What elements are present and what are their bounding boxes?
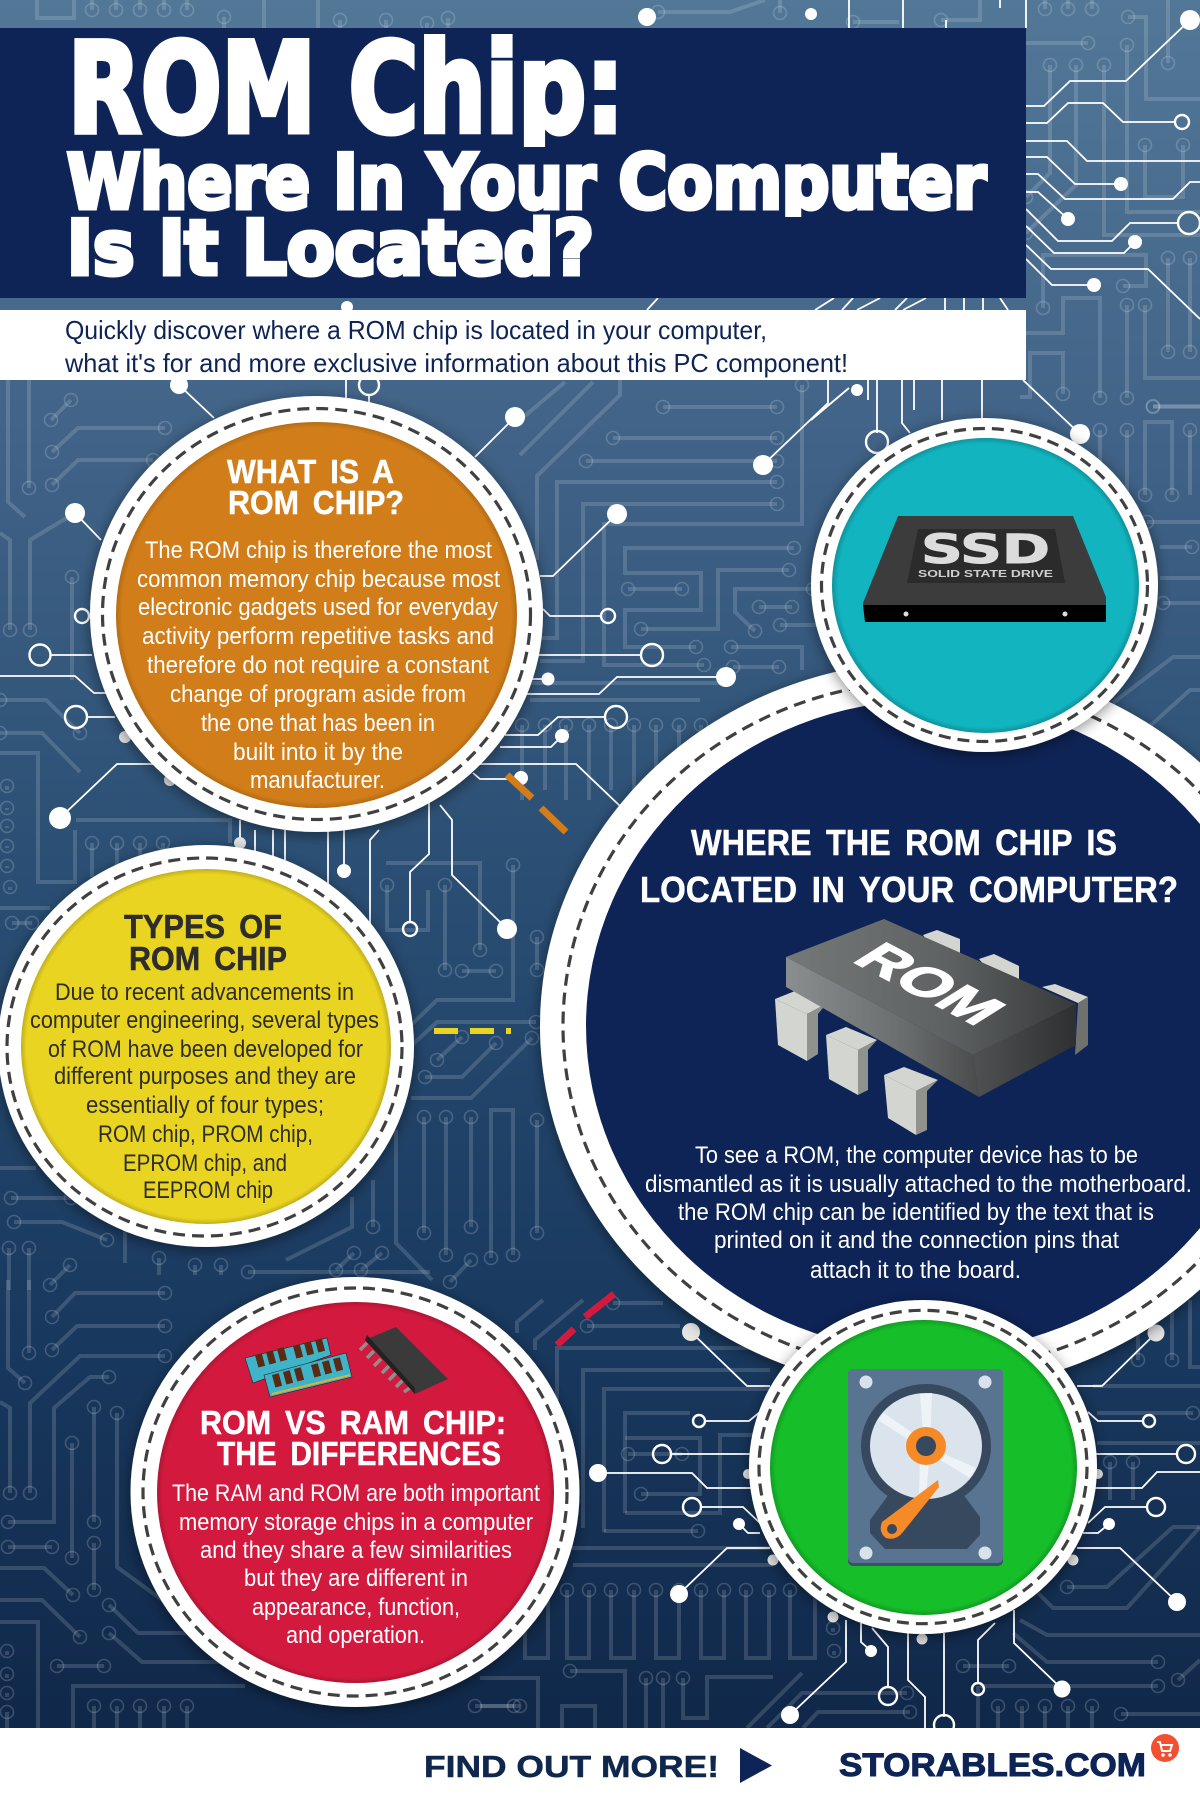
heading: ROM vs RAM chip: ROM VS RAM CHIP: <box>200 1405 506 1442</box>
body text: types of ROM chip: different purposes and they are <box>54 1063 356 1090</box>
body text: ROM vs RAM chip: memory storage chips in a computer <box>179 1509 533 1536</box>
body text: ROM vs RAM chip: and they share a few similarities <box>200 1537 512 1564</box>
icon: SSD drive: SSD <box>921 527 1050 573</box>
body text: where the ROM chip is located <box>645 1142 1192 1284</box>
heading: types of ROM chip <box>124 909 287 978</box>
icon: ROM chip <box>775 919 1088 1135</box>
heading: ROM vs RAM chip <box>200 1405 506 1473</box>
chip label: ROM <box>841 935 1019 1033</box>
body text: types of ROM chip: EPROM chip, and <box>123 1150 287 1177</box>
body text: types of ROM chip: of ROM have been developed for <box>48 1036 363 1063</box>
body text: types of ROM chip: EEPROM chip <box>143 1177 273 1204</box>
panel: types of ROM chip <box>0 845 414 1247</box>
body text: what is a ROM chip: built into it by the <box>233 739 403 766</box>
body text: what is a ROM chip: change of program aside from <box>170 681 466 708</box>
body text: where the ROM chip is located: To see a ROM, the computer device has to be <box>695 1142 1138 1169</box>
icon: hard disk drive <box>848 1369 1003 1566</box>
body text: ROM vs RAM chip: but they are different in <box>244 1565 468 1592</box>
body text: where the ROM chip is located: attach it to the board. <box>810 1257 1021 1284</box>
body text: types of ROM chip: Due to recent advancements in <box>55 979 354 1006</box>
body text: types of ROM chip: ROM chip, PROM chip, <box>98 1121 313 1148</box>
icon: SSD drive: SOLID STATE DRIVE <box>918 568 1053 580</box>
body text: types of ROM chip: essentially of four types; <box>86 1092 324 1119</box>
call to action: FIND OUT MORE! <box>424 1749 719 1784</box>
title line 1: ROM Chip: <box>68 18 624 162</box>
body text: what is a ROM chip: the one that has been in <box>201 710 435 737</box>
heading: where the ROM chip is located <box>640 822 1178 910</box>
body text: ROM vs RAM chip: and operation. <box>286 1622 425 1649</box>
subtitle panel: Quickly discover where a ROM chip is located in your computer, <box>65 315 767 345</box>
icon: cart badge <box>1151 1734 1179 1762</box>
heading: ROM vs RAM chip: THE DIFFERENCES <box>217 1436 501 1473</box>
panel: hard drive circle <box>749 1300 1097 1634</box>
brand name: STORABLES.COM <box>839 1747 1146 1783</box>
title line 3: Is It Located? <box>67 204 594 292</box>
panel: what is a ROM chip <box>90 396 543 832</box>
heading: what is a ROM chip: ROM CHIP? <box>228 485 404 522</box>
heading: what is a ROM chip <box>227 454 404 522</box>
dashes: yellow connector <box>434 1028 511 1034</box>
footer bar <box>0 1728 1200 1800</box>
body text: where the ROM chip is located: printed on it and the connection pins that <box>714 1227 1119 1254</box>
subtitle panel: what it's for and more exclusive information about this PC component! <box>64 348 848 378</box>
body text: what is a ROM chip: common memory chip because most <box>137 566 500 593</box>
panel: SSD circle <box>811 418 1158 752</box>
body text: where the ROM chip is located: the ROM chip can be identified by the text that is <box>678 1199 1154 1226</box>
panel: ROM vs RAM chip <box>130 1277 580 1707</box>
icon: SSD drive <box>863 516 1106 622</box>
body text: what is a ROM chip <box>137 537 500 794</box>
body text: what is a ROM chip: manufacturer. <box>250 767 385 794</box>
body text: what is a ROM chip: electronic gadgets used for everyday <box>138 594 499 621</box>
icon: RAM sticks <box>245 1338 352 1397</box>
body text: ROM vs RAM chip <box>172 1480 540 1649</box>
heading: types of ROM chip: TYPES OF <box>124 909 282 946</box>
title banner <box>0 18 1026 298</box>
heading: what is a ROM chip: WHAT IS A <box>227 454 394 491</box>
heading: types of ROM chip: ROM CHIP <box>129 941 287 978</box>
panel: where the ROM chip is located <box>540 661 1200 1391</box>
body text: types of ROM chip <box>30 979 379 1204</box>
body text: what is a ROM chip: The ROM chip is therefore the most <box>145 537 492 564</box>
heading: where the ROM chip is located: WHERE THE ROM CHIP IS <box>691 822 1117 863</box>
body text: ROM vs RAM chip: The RAM and ROM are both important <box>172 1480 540 1507</box>
body text: what is a ROM chip: activity perform repetitive tasks and <box>142 623 494 650</box>
title line 2: Where In Your Computer <box>67 138 986 226</box>
body text: what is a ROM chip: therefore do not require a constant <box>147 652 489 679</box>
icon: IC chip <box>360 1327 448 1394</box>
subtitle panel <box>0 310 1026 380</box>
body text: ROM vs RAM chip: appearance, function, <box>252 1594 460 1621</box>
dashes: orange connector <box>507 775 566 832</box>
dashes: red connector <box>557 1294 614 1345</box>
body text: types of ROM chip: computer engineering, several types <box>30 1007 379 1034</box>
icon: arrow <box>740 1748 772 1783</box>
